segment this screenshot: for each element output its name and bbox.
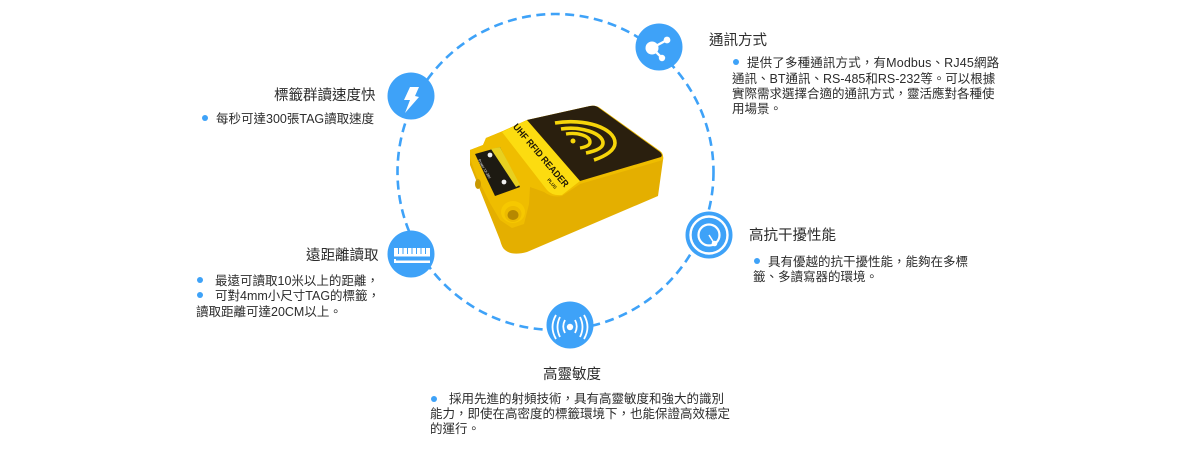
icon: antenna signal xyxy=(546,302,594,348)
text line: 最遠可讀取10米以上的距離， xyxy=(215,274,379,288)
icon: share xyxy=(636,24,682,70)
icon: target radar xyxy=(686,212,732,258)
product: UHF RFID reader: UHF RFID READER xyxy=(510,122,571,190)
text line: 讀取距離可達20CM以上。 xyxy=(196,305,342,319)
heading: 高抗干擾性能 xyxy=(749,228,836,244)
text line: 能力，即使在高密度的標籤環境下，也能保證高效穩定 xyxy=(430,407,730,421)
product: UHF RFID reader: Power 12-36V xyxy=(477,158,492,180)
text line: 採用先進的射頻技術，具有高靈敏度和強大的識別 xyxy=(449,392,724,406)
icon: lightning bolt xyxy=(388,72,434,120)
text line: 實際需求選擇合適的通訊方式，靈活應對各種使 xyxy=(732,87,995,101)
bullet xyxy=(431,396,437,402)
text: 每秒可達300張TAG讀取速度 xyxy=(216,112,374,126)
bullet xyxy=(733,59,739,65)
heading: 標籤群讀速度快 xyxy=(274,88,376,104)
bullet xyxy=(197,277,203,283)
text line: 籤、多讀寫器的環境。 xyxy=(753,270,878,284)
product: UHF RFID reader xyxy=(470,106,663,254)
product: UHF RFID reader: PLUS xyxy=(546,177,558,190)
bullet xyxy=(754,258,760,264)
heading: 通訊方式 xyxy=(709,33,767,49)
bullet xyxy=(202,115,208,121)
heading: 高靈敏度 xyxy=(543,367,601,383)
icon: ruler xyxy=(388,230,434,278)
text line: 具有優越的抗干擾性能，能夠在多標 xyxy=(768,255,968,269)
text line: 用場景。 xyxy=(732,102,782,116)
text line: 可對4mm小尺寸TAG的標籤， xyxy=(215,289,380,303)
dashed ring xyxy=(398,14,714,330)
text line: 的運行。 xyxy=(430,422,480,436)
text line: 通訊、BT通訊、RS-485和RS-232等。可以根據 xyxy=(732,72,995,86)
heading: 遠距離讀取 xyxy=(306,248,378,264)
text line: 提供了多種通訊方式，有Modbus、RJ45網路 xyxy=(747,56,999,70)
bullet xyxy=(197,292,203,298)
